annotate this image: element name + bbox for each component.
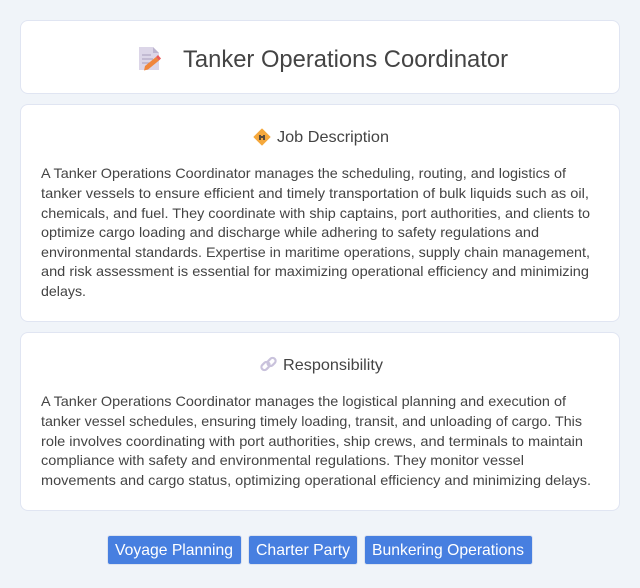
job description text xyxy=(41,165,590,299)
tag: bunkering operations: Bunkering Operations xyxy=(372,542,524,559)
tag: voyage planning: Voyage Planning xyxy=(115,542,233,559)
responsibility text: A Tanker Operations Coordinator manages the logistical planning and execution of xyxy=(41,393,566,409)
responsibility text: role involves coordinating with port authorities, ship crews, and terminals to maintain xyxy=(41,433,583,449)
job description text: environmental standards. Expertise in maritime operations, supply chain management, xyxy=(41,244,590,260)
title: Tanker Operations Coordinator xyxy=(183,46,508,73)
responsibility text xyxy=(41,393,591,488)
job description text: A Tanker Operations Coordinator manages the scheduling, routing, and logistics of xyxy=(41,165,566,181)
job description text: and risk assessment is essential for maximizing operational efficiency and minimizing xyxy=(41,263,589,279)
responsibility text: tanker vessel schedules, ensuring timely loading, transit, and unloading of cargo. This xyxy=(41,413,582,429)
responsibility heading: Responsibility xyxy=(283,357,383,374)
job description text: delays. xyxy=(41,283,86,299)
job description heading: Job Description xyxy=(277,129,389,146)
tag: voyage planning xyxy=(107,535,242,565)
responsibility text: compliance with safety and environmental regulations. They monitor vessel xyxy=(41,452,524,468)
responsibility text: movements and cargo status, optimizing operational efficiency and minimizing delays. xyxy=(41,472,591,488)
panel: title xyxy=(20,20,620,94)
tag: charter party xyxy=(248,535,358,565)
job description text: chemicals, and fuel. They coordinate with ship captains, port authorities, and clients to xyxy=(41,205,590,221)
panel: job description xyxy=(20,104,620,322)
job description text: optimize cargo loading and discharge while adhering to safety regulations and xyxy=(41,224,539,240)
tag: charter party: Charter Party xyxy=(256,542,350,559)
tag: bunkering operations xyxy=(364,535,533,565)
panel: responsibility xyxy=(20,332,620,511)
job description text: tanker vessels to ensure efficient and timely transportation of bulk liquids such as oil, xyxy=(41,185,589,201)
